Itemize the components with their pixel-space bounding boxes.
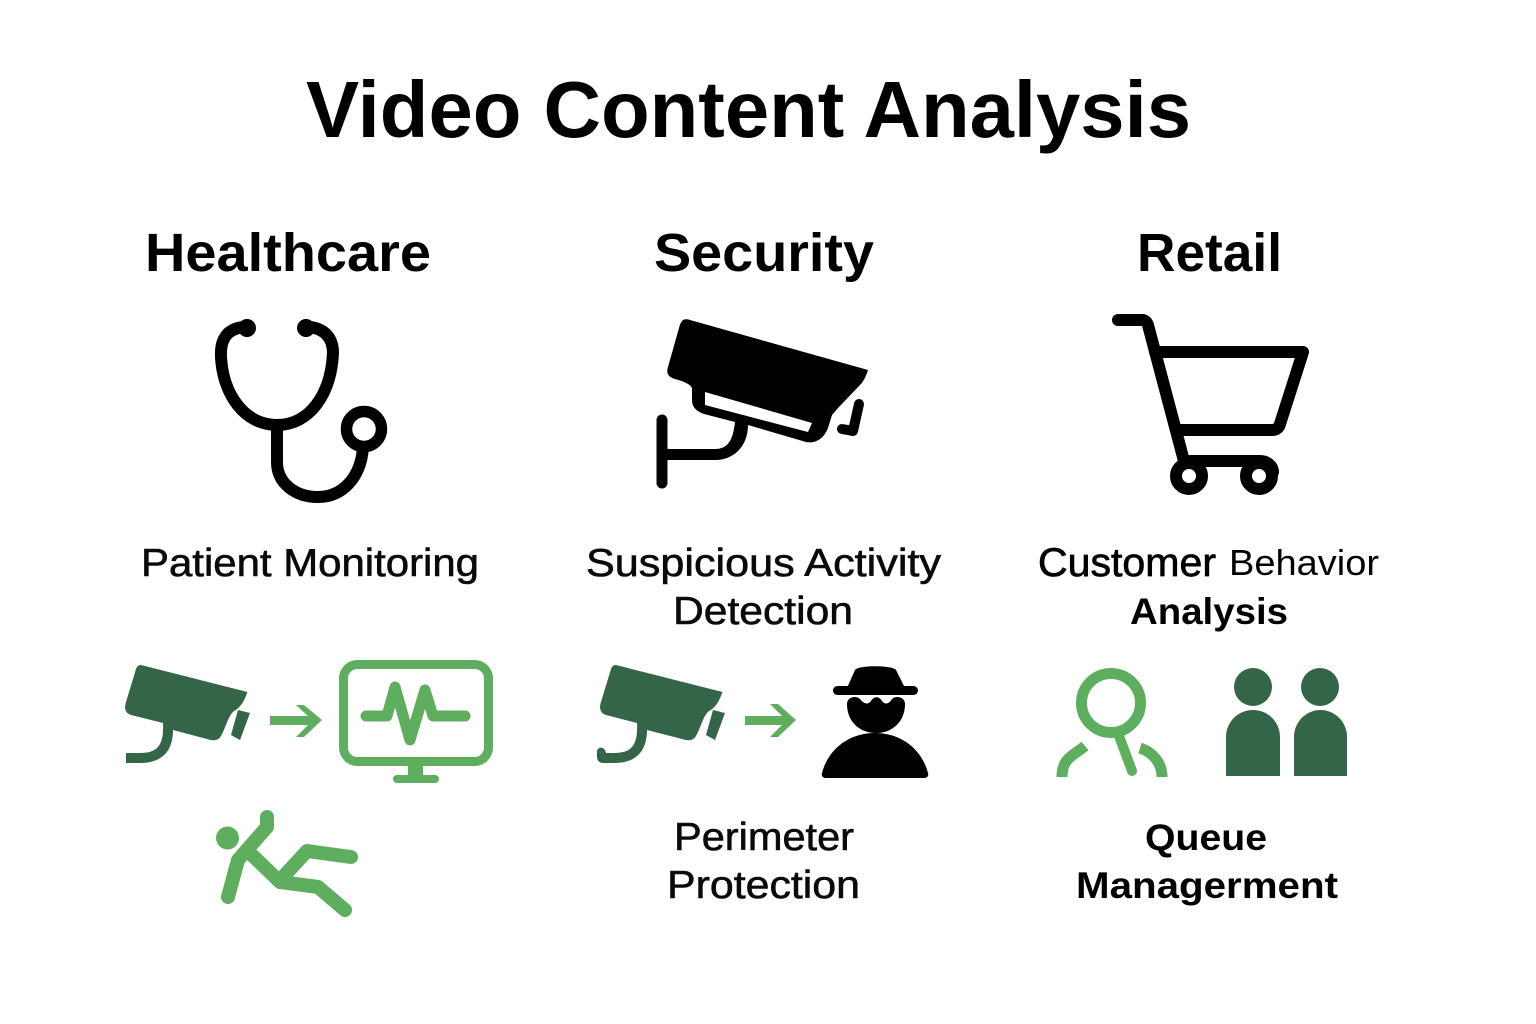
icon: intruder with hat [822, 666, 928, 778]
icon: shopping cart [1118, 320, 1303, 489]
icon: stethoscope [221, 319, 382, 497]
icon: queue of people [1226, 668, 1347, 776]
panel: healthcare [125, 223, 489, 910]
heading: security: Security [654, 223, 874, 283]
text: perimeter protection: Protection [667, 864, 860, 907]
text: queue management [1076, 817, 1338, 906]
text: customer behavior analysis: Analysis [1130, 591, 1288, 632]
text: customer behavior analysis: Behavior [1229, 542, 1379, 583]
text: perimeter protection [667, 816, 860, 907]
text: customer behavior analysis [1038, 541, 1379, 632]
arrow: camera to intruder [745, 704, 796, 737]
icon: green camera [597, 665, 725, 763]
text: customer behavior analysis: Customer [1038, 541, 1216, 585]
panel: security [586, 223, 942, 907]
heading: healthcare: Healthcare [145, 223, 431, 283]
text: queue management: Managerment [1076, 865, 1338, 906]
text: suspicious activity detection: Detection [673, 590, 853, 633]
icon: falling person [216, 817, 351, 910]
text: queue management: Queue [1145, 817, 1267, 858]
text: perimeter protection: Perimeter [674, 816, 854, 859]
text: suspicious activity detection [586, 542, 942, 633]
heading: retail: Retail [1137, 223, 1282, 283]
icon: green camera [125, 665, 250, 763]
text: patient monitoring: Patient Monitoring [141, 542, 479, 585]
panel: retail [1038, 223, 1379, 906]
text: suspicious activity detection: Suspicious Activity [586, 542, 942, 585]
icon: security camera [662, 319, 868, 483]
title: Video Content Analysis [306, 65, 1191, 154]
arrow: camera to monitor [270, 705, 322, 737]
icon: patient monitor [344, 664, 488, 779]
icon: magnifier person [1062, 674, 1162, 777]
